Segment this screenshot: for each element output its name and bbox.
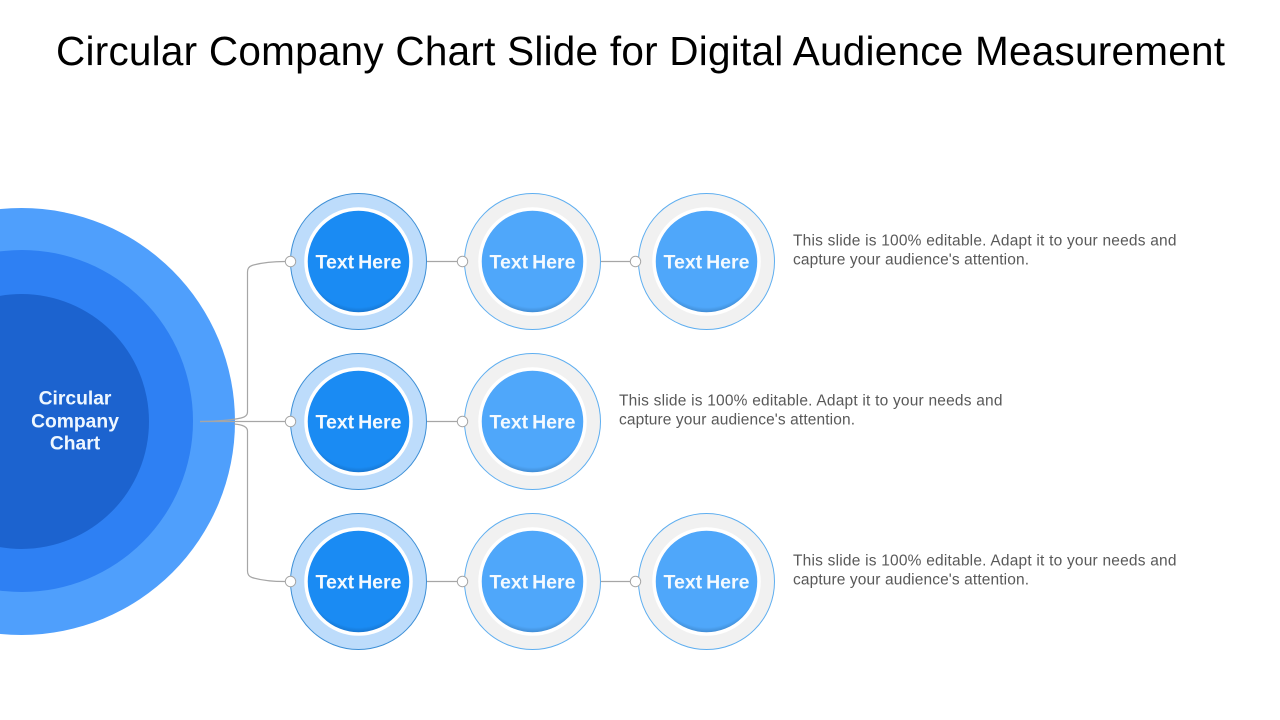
node: row 1 third: Text Here [664,252,750,274]
description: row 1: capture your audience's attention. [793,252,1029,268]
description: row 1: This slide is 100% editable. Adapt it to your needs and [793,232,1176,250]
node: row 2 second [464,354,600,490]
connector dots [285,256,641,587]
node: row 3 primary [290,514,426,650]
description: row 3: This slide is 100% editable. Adapt it to your needs and [793,552,1176,570]
node: row 3 second: Text Here [490,572,576,594]
node: row 1 primary: Text Here [316,252,402,274]
central label: Circular [39,388,111,410]
node: row 3 second [464,514,600,650]
node: row 2 primary: Text Here [316,412,402,434]
description: row 3: capture your audience's attention. [793,572,1029,588]
concentric company chart circle [0,208,235,635]
node: row 1 third [638,194,774,330]
node: row 3 third [638,514,774,650]
node: row 1 primary [290,194,426,330]
row 3 [290,514,774,650]
central label: Company [31,412,119,432]
description: row 2: capture your audience's attention. [619,412,855,428]
row 1 [290,194,774,330]
description: row 2: This slide is 100% editable. Adapt it to your needs and [619,392,1002,410]
node: row 3 third: Text Here [664,572,750,594]
node: row 2 second: Text Here [490,412,576,434]
title: Circular Company Chart Slide for Digital Audience Measurement [56,28,1225,74]
connector lines from hub to rows [200,262,631,582]
node: row 3 primary: Text Here [316,572,402,594]
row 2 [290,354,600,490]
node: row 1 second: Text Here [490,252,576,274]
node: row 2 primary [290,354,426,490]
node: row 1 second [464,194,600,330]
central label: Chart [50,434,101,454]
